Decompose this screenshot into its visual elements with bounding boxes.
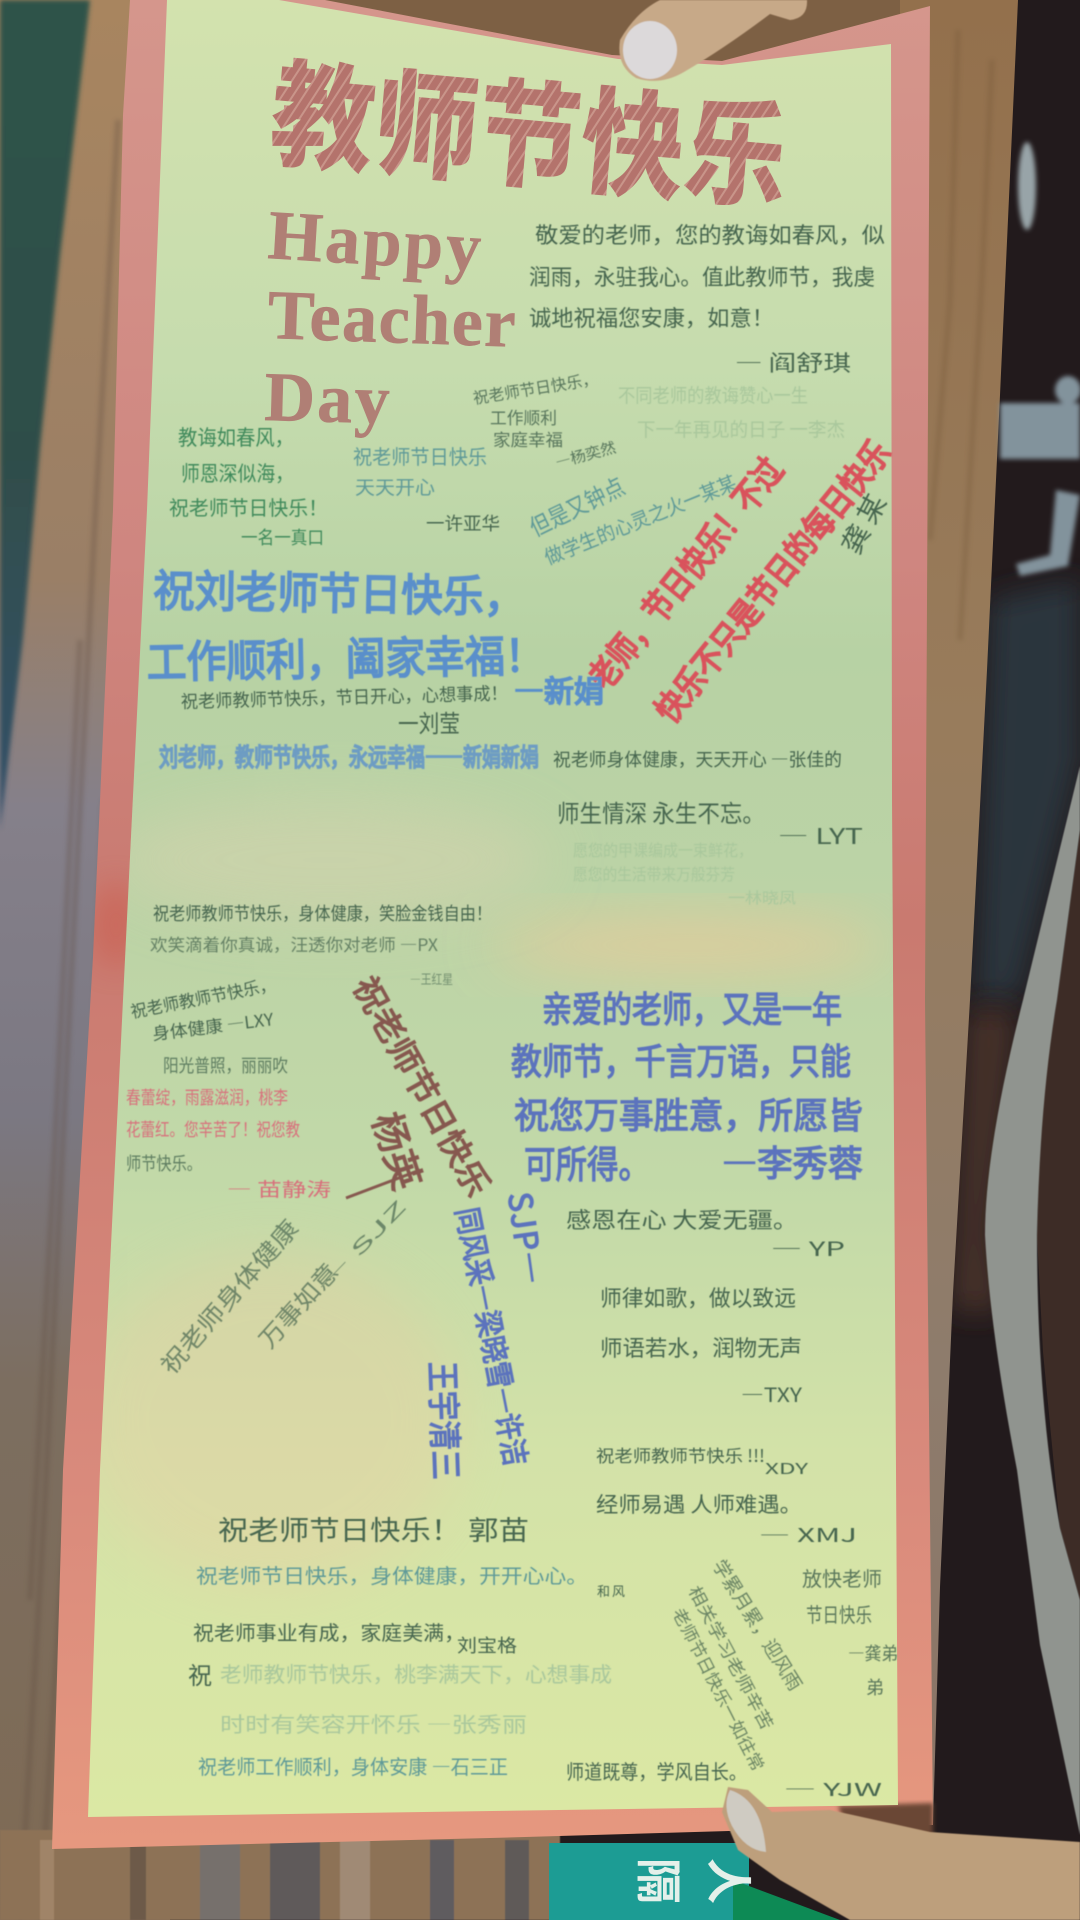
message: blue sideways names: 同风采—梁晓雪—许洁 (447, 1203, 540, 1469)
message: red-green 苗静涛: 阳光普照，丽丽吹 (163, 1052, 288, 1078)
message: diagonal grey SJZ (151, 1194, 412, 1381)
message: diagonal small lines: 老师节日快乐一如往常 (668, 1603, 772, 1775)
message: 大爱无疆: 感恩在心 大爱无疆。 (566, 1203, 798, 1235)
message: 身体健康 PX: —王红星 (410, 969, 453, 988)
poster: salmon backing sheet (52, 0, 933, 1849)
message: brown slanted: 杨英 (362, 1104, 438, 1196)
message: 教诲如春风 green: 师恩深似海， (181, 458, 294, 488)
poster: green paper sheet (80, 0, 898, 1817)
message: 事业有成: 刘宝格 (457, 1632, 517, 1658)
message: blue sideways names (420, 1203, 540, 1480)
message: 身体健康 天天开心: 祝老师身体健康，天天开心 —张佳的 (553, 746, 842, 772)
message: brown slanted: 祝老师节日快乐 (343, 967, 504, 1204)
teal sign with white characters: 隔 (628, 1858, 694, 1904)
curved metal ring (985, 766, 1080, 1835)
message: 心想事成: 祝老师教师节快乐，节日开心，心想事成！ (180, 679, 508, 714)
message: red diagonal: 老师，节日快乐！不过 (575, 445, 794, 699)
message: faded top right: 下一年再见的日子 一李杰 (637, 415, 845, 442)
message: 郭苗: 祝老师节日快乐！ 郭苗 (218, 1509, 529, 1548)
grey bracket top right (1000, 142, 1080, 576)
message: red diagonal: 快乐不只是节日的每日快乐 (642, 428, 900, 731)
message: 师生情深 LYT: 师生情深 永生不忘。 (557, 794, 765, 829)
signature stroke (346, 1170, 420, 1198)
message: 阎舒琪 (529, 218, 885, 378)
heading: Happy Teacher Day (264, 197, 517, 439)
message: 工作顺利 石三正: 祝老师工作顺利，身体安康 —石三正 (198, 1751, 508, 1780)
message: 李秀蓉 big indigo (511, 981, 863, 1189)
message: 阎舒琪: — 阎舒琪 (735, 346, 851, 378)
message: red-green 苗静涛: — 苗静涛 (227, 1175, 331, 1202)
message: 龚弟 right column: 放快老师 (802, 1563, 882, 1592)
message: 大爱无疆 (566, 1203, 845, 1262)
message: 李秀蓉 big indigo: —李秀蓉 (722, 1135, 863, 1187)
message: faded 祝老师: 时时有笑容开怀乐 —张秀丽 (220, 1709, 527, 1739)
message: 心想事成: 一刘莹 (398, 704, 460, 739)
message: diagonal small lines (668, 1554, 809, 1775)
message: XDY: 祝老师教师节快乐 !!! (596, 1442, 765, 1467)
message: 祝刘老师 big blue (146, 555, 604, 711)
message: faded top right: 不同老师的教诲赞心一生 (618, 381, 808, 408)
message: faded 林晓凤 (573, 837, 796, 908)
message: 龚弟 right column: 弟 (866, 1674, 884, 1700)
heading: Happy Teacher Day: Happy (266, 197, 483, 287)
message: XDY: XDY (765, 1458, 808, 1479)
message: faded 祝老师: 祝 (188, 1656, 212, 1691)
dark teal floor top left (0, 0, 90, 830)
message: 学风自长 YJW (566, 1756, 882, 1802)
message: faded 祝老师: 老师教师节快乐，桃李满天下，心想事成 (220, 1659, 612, 1689)
top hand thumb (619, 0, 807, 81)
dark brown right of ring (1037, 830, 1080, 1600)
message: 事业有成: 祝老师事业有成，家庭美满， (193, 1617, 465, 1646)
paper lighting patches (118, 803, 877, 1552)
message: faded top right (618, 381, 845, 442)
message: 龚弟 right column: —龚弟 (848, 1640, 898, 1666)
message: diagonal grey SJZ: 万事如意 (249, 1254, 345, 1355)
message: 大爱无疆: — YP (771, 1233, 845, 1262)
message: 龚弟 right column: 节日快乐 (806, 1599, 872, 1628)
message: 身体健康 PX: 祝老师教师节快乐，身体健康，笑脸金钱自由！ (153, 900, 492, 926)
message: red-green 苗静涛: 师节快乐。 (126, 1150, 202, 1176)
message: 学风自长 YJW: 师道既尊，学风自长。 (566, 1756, 747, 1785)
message: 工作顺利 家庭幸福: 祝老师节日快乐， (471, 366, 599, 409)
message: 师生情深 LYT: — LYT (778, 819, 863, 851)
message: XMJ: 经师易遇 人师难遇。 (596, 1489, 802, 1519)
message: 教诲如春风 green: 一名一真口 (241, 524, 324, 550)
wood table left (0, 0, 170, 1920)
message: faded 林晓凤: 一林晓凤 (728, 887, 796, 908)
wood strip below poster (0, 1830, 560, 1920)
wood grain stripes left (20, 120, 118, 1920)
message: XMJ (596, 1489, 857, 1548)
handwritten messages (126, 218, 900, 1802)
message: 学风自长 YJW: — YJW (784, 1776, 882, 1802)
message: 天天开心: 天天开心 (355, 473, 435, 500)
message: 李秀蓉 big indigo: 可所得。 (524, 1134, 650, 1189)
message: blurred blue line: 刘老师，教师节快乐，永远幸福——新娟新娟 (159, 738, 539, 774)
message: 天天开心: 祝老师节日快乐 (353, 441, 487, 470)
message: XMJ: — XMJ (759, 1521, 857, 1548)
message: 祝刘老师 big blue: 工作顺利，阖家幸福！ (146, 620, 545, 691)
teal sign with white characters (549, 1843, 840, 1920)
message: 心想事成 (180, 679, 508, 739)
signature: diagonal right edge: 龚某 (831, 487, 895, 560)
message: 师生情深 LYT (557, 794, 863, 851)
message: 阎舒琪: 润雨，永驻我心。值此教师节，我虔 (529, 260, 875, 292)
signature: 和风: 和风 (597, 1581, 625, 1600)
message: 阎舒琪: 诚地祝福您安康，如意！ (529, 301, 774, 333)
message: 教诲如春风 green (169, 422, 328, 550)
message: 李秀蓉 big indigo: 祝您万事胜意，所愿皆 (514, 1087, 863, 1139)
message: LXY (128, 970, 277, 1045)
bright red patch on left edge (94, 884, 128, 965)
message: TXY: 师律如歌，做以致远 (600, 1281, 796, 1313)
wood along top (130, 0, 930, 90)
message: LXY: 身体健康 —LXY (151, 1005, 276, 1045)
hand shadow on lower right edge (838, 1803, 933, 1838)
message: 教诲如春风 green: 祝老师节日快乐！ (169, 492, 328, 521)
message: 祝刘老师 big blue: —新娟 (514, 667, 604, 711)
message: 李秀蓉 big indigo: 亲爱的老师，又是一年 (542, 981, 842, 1033)
title: 教师节快乐: 教师节快乐 (265, 22, 796, 234)
message: red-green 苗静涛 (126, 1052, 331, 1202)
message: faded 林晓凤: 愿您的生活带来万般芬芳 (573, 861, 735, 885)
message: TXY (600, 1281, 802, 1408)
message: red diagonal (575, 428, 900, 731)
message: XDY (596, 1442, 808, 1479)
message: slanted blue-grey note: 做学生的心灵之火一某某 (539, 467, 740, 571)
message: LXY: 祝老师教师节快乐， (128, 970, 277, 1023)
message: faded 林晓凤: 愿您的甲课编成一束鲜花， (573, 837, 753, 861)
message: 祝刘老师 big blue: 祝刘老师节日快乐， (153, 555, 526, 625)
message: TXY: 师语若水，润物无声 (600, 1331, 802, 1363)
message: red-green 苗静涛: 春蕾绽，雨露滋润，桃李 (126, 1084, 288, 1110)
teal sign with white characters: 人 (698, 1858, 764, 1904)
message: 天天开心: 一许亚华 (426, 510, 500, 536)
message: diagonal grey SJZ: 祝老师身体健康 (151, 1210, 305, 1381)
message: 李秀蓉 big indigo: 教师节，千言万语，只能 (511, 1033, 851, 1085)
brown shade beside ring (952, 1010, 1015, 1311)
heading: Happy Teacher Day: Teacher (266, 277, 517, 363)
message: TXY: —TXY (741, 1379, 802, 1408)
message: 工作顺利 家庭幸福 (471, 366, 618, 473)
message: red-green 苗静涛: 花蕾红。您辛苦了！祝您教 (126, 1116, 300, 1142)
message: 身体健康 PX: 欢笑滴着你真诚，汪透你对老师 —PX (150, 931, 438, 956)
message: 龚弟 right column (802, 1563, 898, 1700)
message: 工作顺利 家庭幸福: 家庭幸福 (493, 426, 563, 451)
bottom hand thumb (722, 1787, 1080, 1920)
message: 阎舒琪: 敬爱的老师，您的教诲如春风，似 (535, 218, 885, 250)
wood table right (900, 0, 1018, 1825)
message: 工作顺利 家庭幸福: —杨奕然 (553, 436, 618, 473)
message: 教诲如春风 green: 教诲如春风， (178, 422, 294, 452)
message: faded 祝老师 (188, 1656, 612, 1739)
message: diagonal small lines: 学累月累，迎风雨 (707, 1554, 809, 1695)
message: 天天开心 (353, 441, 500, 536)
message: SJP sideways: SJP— (498, 1189, 556, 1286)
message: 工作顺利 家庭幸福: 工作顺利 (490, 404, 557, 429)
wood grain stripes right (930, 30, 992, 640)
heading: Happy Teacher Day: Day (264, 359, 391, 439)
message: slanted blue-grey note: 但是又钟点 (523, 467, 630, 543)
message: 开开心心: 祝老师节日快乐，身体健康，开开心心。 (196, 1560, 588, 1589)
message: 事业有成 (193, 1617, 517, 1658)
dark bluish area under the bracket (975, 580, 1080, 1000)
message: blue sideways names: 王宇清三 (420, 1361, 473, 1480)
message: diagonal grey SJZ: — SJZ (310, 1194, 412, 1298)
message: 身体健康 PX (150, 900, 492, 988)
message: diagonal small lines: 相关学习老师辛苦 (684, 1581, 781, 1734)
